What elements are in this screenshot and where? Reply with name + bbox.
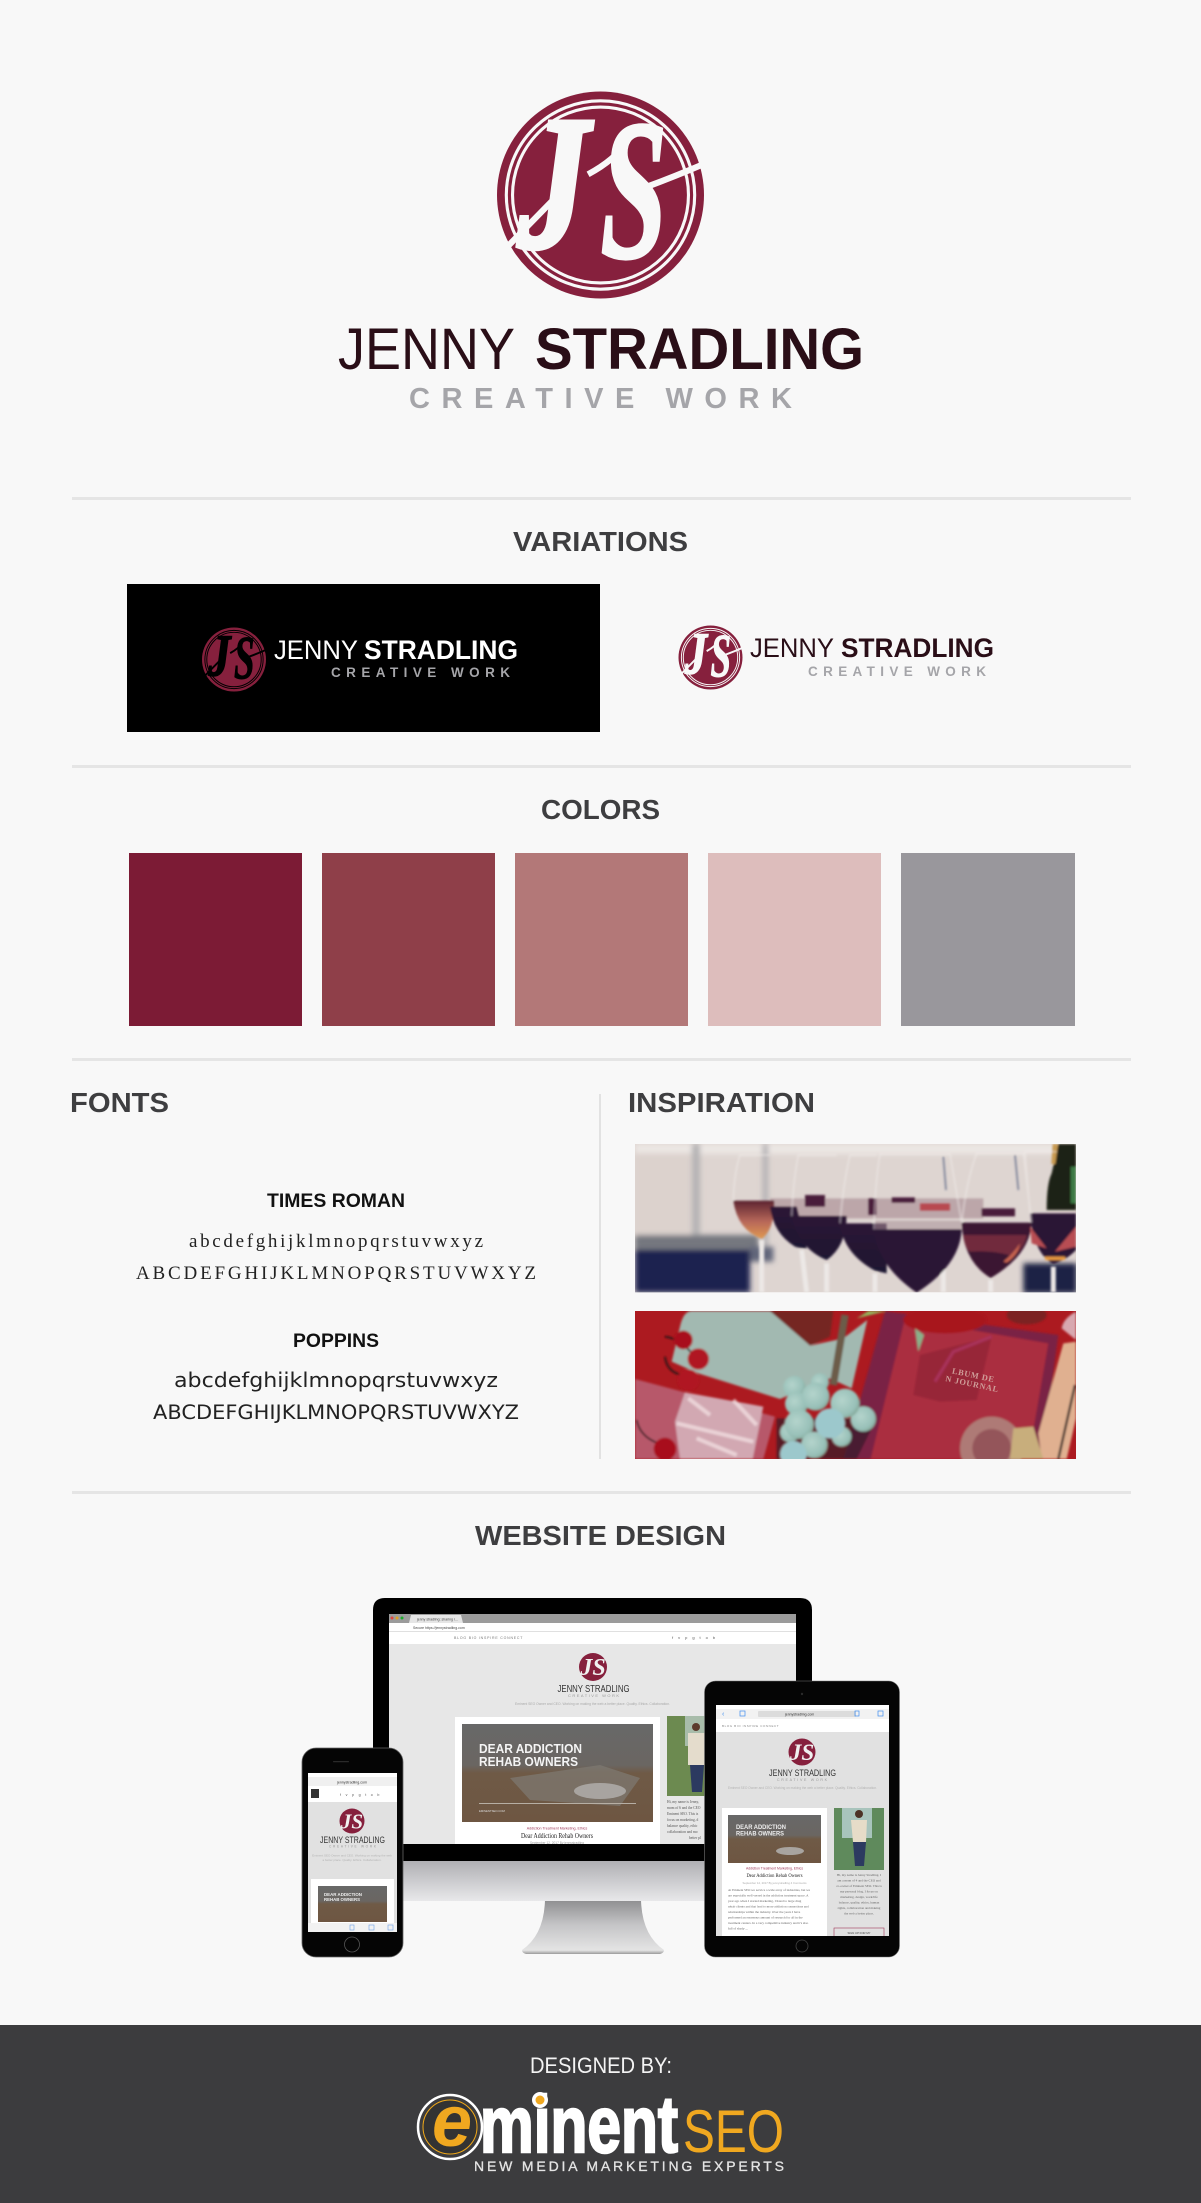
monitor screen: Eminent SEO Owner and CEO. Working on making the web a better place. Quality. Ethics. Collaboration. — [515, 1702, 670, 1706]
tablet screen: REHAB OWNERS — [736, 1830, 785, 1838]
heading: colors: COLORS — [541, 794, 660, 825]
tablet screen: my personal blog. I focus on — [840, 1890, 878, 1894]
ribbon — [935, 1337, 992, 1382]
phone screen: a better place. Quality. Ethics. Collaboration. — [323, 1858, 382, 1862]
monitor screen: EMINENTSEO.COM — [479, 1809, 505, 1813]
glass 6 wine — [962, 1223, 1032, 1278]
glass 3 wine — [792, 1216, 847, 1260]
variation: logo on light: CREATIVE WORK — [808, 664, 986, 679]
glass 4 wine — [840, 1223, 887, 1273]
teal cloth — [672, 1311, 867, 1399]
variation: logo on light: J — [684, 623, 709, 687]
glass 2 wine — [770, 1207, 807, 1248]
variation: logo on light: S — [710, 623, 731, 691]
grapes — [811, 1373, 829, 1391]
crystal glass — [675, 1392, 763, 1459]
monitor screen: balance quality, ethic — [667, 1824, 698, 1829]
device: phone — [302, 1748, 403, 1957]
amber glass — [770, 1311, 833, 1346]
tablet screen: Hi, my name is Jenny Stradling. I — [837, 1873, 881, 1878]
device: tablet — [704, 1681, 900, 1957]
monitor screen: fvpgtob — [672, 1635, 720, 1640]
swatch 5 — [901, 853, 1075, 1026]
tablet screen: Addiction Treatment Marketing, Ethics — [746, 1866, 803, 1870]
glass 1 wine — [733, 1201, 774, 1239]
wordmark: minent: minent — [480, 2080, 678, 2169]
tablet screen: Dear Addiction Rehab Owners — [746, 1873, 802, 1879]
tablet screen: the web a better place. — [844, 1912, 874, 1916]
wordmark: SEO: SEO — [683, 2098, 784, 2165]
tagline: NEW MEDIA MARKETING EXPERTS — [474, 2158, 784, 2174]
monitor screen: Secure https://jennystradling.com — [413, 1626, 465, 1630]
variation: logo on black: JENNY — [274, 635, 358, 665]
tablet screen: co-owner of Eminent SEO. This is — [836, 1884, 882, 1888]
device: desktop monitor — [373, 1598, 812, 1954]
font sample: Times Roman: TIMES ROMAN — [267, 1191, 405, 1212]
variation: logo on black — [127, 584, 600, 732]
font sample: Times Roman — [136, 1191, 536, 1284]
tablet screen: BLOG BIO INSPIRE CONNECT — [722, 1724, 779, 1728]
phone screen: jennystradling.com — [336, 1780, 367, 1784]
divider — [72, 1491, 1131, 1494]
photo: red still life — [635, 1311, 1076, 1459]
phone screen: fvpgtob — [340, 1793, 384, 1797]
tablet screen: marketing, design, work/life — [840, 1895, 878, 1900]
divider — [72, 765, 1131, 768]
tablet screen: ‹ — [722, 1711, 725, 1718]
book cover title — [945, 1368, 998, 1392]
swatch 3 — [515, 853, 688, 1026]
back wine band — [770, 1198, 983, 1218]
i dot — [532, 2092, 548, 2108]
shell strip — [1038, 1342, 1076, 1459]
main logo: STRADLING — [535, 317, 864, 382]
tablet screen: jennystradling.com — [784, 1712, 814, 1716]
monitor screen: Dear Addiction Rehab Owners — [521, 1832, 593, 1840]
colour swatches — [129, 853, 1075, 1026]
tablet screen: balance, quality, ethics, human — [839, 1900, 880, 1906]
shadow on book — [913, 1337, 992, 1402]
tagline: CREATIVE WORK — [409, 383, 792, 415]
monitor screen: collaboration and mo — [667, 1830, 698, 1834]
phone screen: CREATIVE WORK — [329, 1844, 377, 1848]
phone screen: JS — [340, 1810, 363, 1834]
tablet screen: relationships within the industry. Over the years I have — [728, 1910, 801, 1914]
bottle — [1047, 1144, 1076, 1210]
emblem — [418, 2082, 482, 2162]
swatch 2 — [322, 853, 495, 1026]
monitor stand — [522, 1900, 664, 1954]
monitor screen: Eminent SEO. This is — [667, 1812, 699, 1816]
font sample: Poppins: ABCDEFGHIJKLMNOPQRSTUVWXYZ — [153, 1401, 519, 1424]
font sample: Poppins: abcdefghijklmnopqrstuvwxyz — [174, 1368, 498, 1392]
tablet screen: treatment centers. In a very competitive industry and it's also — [728, 1921, 809, 1925]
heading: fonts: FONTS — [70, 1087, 169, 1118]
tablet screen: rehab clients and that lead to more addiction connections and — [728, 1904, 809, 1908]
rose — [902, 1313, 984, 1334]
phone screen: DEAR ADDICTION — [324, 1892, 362, 1898]
twig — [833, 1315, 845, 1385]
phone screen: Eminent SEO Owner and CEO. Working on making the web — [312, 1854, 392, 1858]
tablet screen: September 12, 2017 By jennystradling 4 Comments — [742, 1881, 807, 1885]
tablet screen: CREATIVE WORK — [777, 1778, 828, 1782]
glass rims — [733, 1152, 1057, 1229]
phone screen — [308, 1773, 397, 1932]
tablet screen: performed an enormous amount of research for all in the — [728, 1916, 803, 1920]
phone screen: JENNY STRADLING — [320, 1835, 385, 1845]
tablet screen: am a mom of 4 and the CEO and — [837, 1878, 881, 1882]
tablet screen: year ago when I started marketing, I listed to large drug — [728, 1899, 802, 1904]
tablet screen: JS — [789, 1740, 814, 1765]
divider — [72, 1058, 1131, 1061]
font sample: Times Roman: abcdefghijklmnopqrstuvwxyz — [189, 1231, 483, 1252]
monitor frame — [373, 1598, 812, 1861]
tablet screen: Eminent SEO Owner and CEO. Working on making the web a better place. Quality. Ethics. Collaboration. — [728, 1786, 877, 1790]
book cover title: N JOURNAL — [945, 1374, 1000, 1394]
nautilus shell — [958, 1415, 1022, 1459]
monitor screen: DEAR ADDICTION — [479, 1741, 582, 1756]
tablet screen: full of shady ... — [728, 1926, 748, 1930]
heading: variations: VARIATIONS — [513, 526, 688, 557]
napkin — [635, 1379, 775, 1459]
main logo — [338, 78, 864, 415]
tablet screen: JENNY STRADLING — [769, 1768, 836, 1779]
variation: logo on black: CREATIVE WORK — [331, 665, 510, 680]
tablet screen: SIGN UP FOR MY — [847, 1931, 871, 1935]
glass 5 wine — [874, 1229, 962, 1293]
tablet screen — [716, 1705, 889, 1938]
variation: logo on black: S — [234, 625, 255, 693]
swatch 4 — [708, 853, 881, 1026]
monitor screen: Addiction Treatment Marketing, Ethics — [527, 1826, 587, 1830]
logo emblem: JS monogram: J — [517, 78, 593, 289]
footer label: DESIGNED BY: — [530, 2053, 672, 2078]
cherries — [637, 1337, 693, 1443]
heading: inspiration: INSPIRATION — [628, 1087, 815, 1118]
font sample: Poppins — [153, 1331, 519, 1424]
footer band — [0, 2025, 1201, 2203]
wordmark: JENNY — [338, 317, 515, 382]
book — [843, 1311, 1058, 1459]
font sample: Times Roman: ABCDEFGHIJKLMNOPQRSTUVWXYZ — [136, 1263, 536, 1284]
monitor screen: CREATIVE WORK — [568, 1693, 619, 1698]
monitor screen: JS — [579, 1655, 606, 1681]
glass 7 wine — [1030, 1213, 1076, 1264]
monitor screen: BLOG BIO INSPIRE CONNECT — [454, 1636, 523, 1640]
photo: wine glasses — [635, 1144, 1077, 1293]
monitor screen: Hi, my name is Jenny, — [667, 1800, 699, 1805]
heading: website design: WEBSITE DESIGN — [475, 1520, 726, 1551]
variation: logo on black: J — [208, 625, 232, 689]
tablet screen: DEAR ADDICTION — [736, 1824, 786, 1831]
tablet screen: are especially well versed in the addiction treatment space. A — [728, 1894, 809, 1898]
monitor screen: focus on marketing, d — [667, 1818, 699, 1823]
phone screen: REHAB OWNERS — [324, 1897, 361, 1903]
tablet screen: rights, collaboration and making — [838, 1906, 881, 1911]
glass stems — [762, 1240, 1053, 1292]
variation: logo on light: STRADLING — [841, 633, 994, 663]
book cover title: LBUM DE — [951, 1366, 995, 1384]
emblem: e — [432, 2082, 472, 2162]
swatch 1 — [129, 853, 302, 1026]
variation: logo on black: STRADLING — [364, 635, 518, 665]
divider — [599, 1094, 601, 1459]
variation: logo on light: JENNY — [750, 633, 834, 663]
monitor screen: mom of 6 and the CEO — [667, 1806, 701, 1810]
tablet screen: At Eminent SEO we service a wide array of industries, but we — [728, 1888, 811, 1893]
monitor screen: REHAB OWNERS — [479, 1754, 578, 1769]
logo emblem: JS monogram — [497, 78, 704, 301]
monitor screen: better pl — [689, 1836, 701, 1840]
variation: logo on light — [678, 623, 994, 691]
phone frame — [302, 1748, 403, 1957]
font sample: Poppins: POPPINS — [293, 1331, 379, 1352]
grape shadow — [777, 1418, 877, 1459]
monitor screen: JENNY STRADLING — [558, 1684, 630, 1695]
monitor screen: jenny stradling: sharing i... — [416, 1618, 458, 1622]
monitor screen — [389, 1614, 796, 1845]
Eminent SEO logo — [418, 2080, 784, 2174]
divider — [72, 497, 1131, 500]
tablet frame — [704, 1681, 900, 1957]
monitor screen: September 12, 2017 By jennystradling — [530, 1841, 584, 1845]
monitor chin — [373, 1860, 812, 1901]
logo emblem: JS monogram: S — [600, 79, 667, 301]
